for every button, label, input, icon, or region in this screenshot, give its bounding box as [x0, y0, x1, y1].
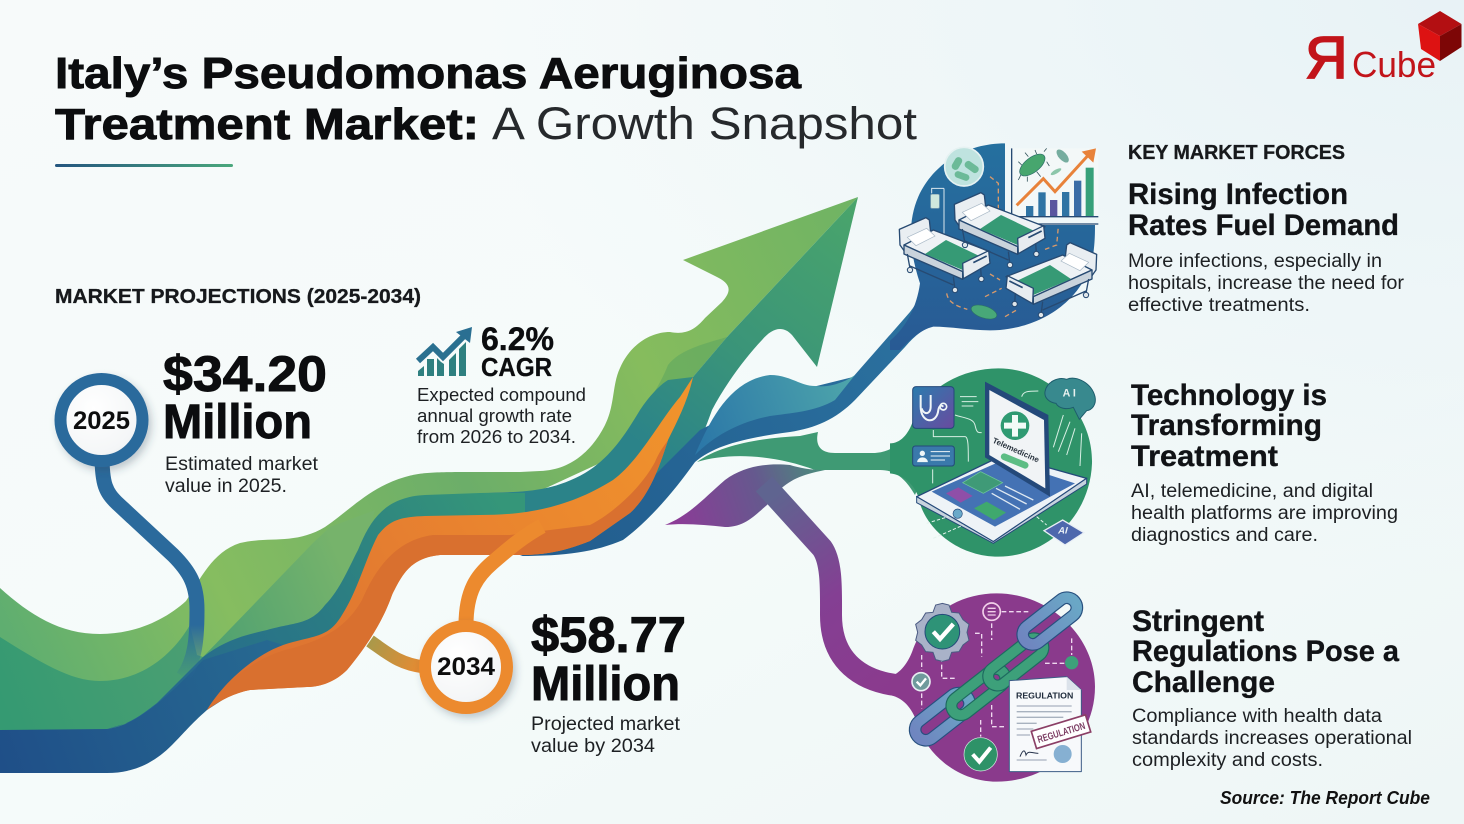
text block: technology [1131, 379, 1398, 546]
stat: CAGR: Expected compound [417, 384, 586, 405]
text block: regulations: Regulations Pose a [1132, 635, 1399, 668]
stat: 2025 value: Estimated market [165, 454, 319, 475]
stat: 2034 value [531, 607, 686, 757]
growth ribbon arrow [0, 197, 938, 773]
text block: regulations: Challenge [1132, 666, 1275, 699]
icon: telemedicine tablet: AI [1057, 525, 1069, 536]
connector: 2034 to ribbon [370, 641, 424, 667]
text block: technology: Technology is [1131, 379, 1327, 412]
marker: 2034 [425, 626, 507, 708]
text block: rising infection rates: hospitals, increase the need for [1128, 273, 1405, 294]
text block: rising infection rates: Rising Infection [1128, 178, 1348, 211]
logo: RCube [1305, 11, 1462, 91]
text block: technology: Transforming [1131, 409, 1322, 442]
stat: 2025 value [163, 346, 327, 497]
marker: 2034: 2034 [437, 653, 495, 681]
icon: hospital beds and infection chart [890, 143, 1098, 350]
text block: technology: Treatment [1131, 440, 1278, 473]
text block: rising infection rates: Rates Fuel Demand [1128, 209, 1399, 242]
stat: 2025 value: Million [163, 396, 312, 449]
title: Italy’s Pseudomonas Aeruginosa [55, 49, 802, 98]
stat: 2025 value: value in 2025. [165, 476, 287, 497]
title underline [55, 164, 233, 167]
heading: key market forces: KEY MARKET FORCES [1128, 142, 1345, 164]
icon: CAGR chart [418, 327, 472, 376]
text block: technology: diagnostics and care. [1131, 525, 1318, 546]
text block: regulations [1132, 605, 1412, 771]
icon: telemedicine tablet [890, 368, 1095, 557]
text block: rising infection rates [1128, 178, 1405, 316]
text block: regulations: complexity and costs. [1132, 750, 1323, 771]
connector: 2025 [102, 455, 197, 677]
text block: technology: AI, telemedicine, and digital [1131, 481, 1373, 502]
icon: regulation chain [890, 593, 1095, 782]
marker: 2025: 2025 [73, 407, 130, 435]
stat: CAGR [417, 321, 586, 447]
marker: 2025 [60, 379, 142, 461]
text block: regulations: Compliance with health data [1132, 706, 1382, 727]
stat: 2034 value: Million [531, 658, 680, 711]
stat: 2025 value: $34.20 [163, 346, 327, 402]
title: A Growth Snapshot [492, 98, 918, 149]
stat: CAGR: CAGR [481, 352, 552, 382]
text block: regulations: standards increases operational [1132, 728, 1412, 749]
stat: 2034 value: Projected market [531, 714, 681, 735]
logo: RCube: Я [1305, 25, 1348, 91]
title [55, 49, 918, 149]
stat: CAGR: annual growth rate [417, 405, 572, 426]
text block: rising infection rates: effective treatments. [1128, 295, 1310, 316]
title: Treatment Market: [55, 100, 479, 149]
stat: 2034 value: value by 2034 [531, 736, 655, 757]
text block: regulations: Stringent [1132, 605, 1264, 638]
stat: 2034 value: $58.77 [531, 607, 686, 663]
stat: CAGR: from 2026 to 2034. [417, 426, 576, 447]
stat: CAGR: 6.2% [481, 321, 554, 357]
icon: telemedicine tablet: A I [1063, 388, 1076, 400]
icon: telemedicine tablet: Telemedicine [991, 436, 1041, 465]
heading: market projections: MARKET PROJECTIONS (2025-2034) [55, 286, 421, 308]
text block: rising infection rates: More infections, especially in [1128, 251, 1382, 272]
icon: regulation chain: REGULATION [1016, 691, 1073, 701]
logo: RCube: Cube [1352, 44, 1436, 85]
connector: 2034 up [466, 526, 542, 625]
text block: technology: health platforms are improving [1131, 503, 1398, 524]
icon: regulation chain: REGULATION [1036, 721, 1087, 746]
source note: Source: The Report Cube [1220, 788, 1430, 808]
